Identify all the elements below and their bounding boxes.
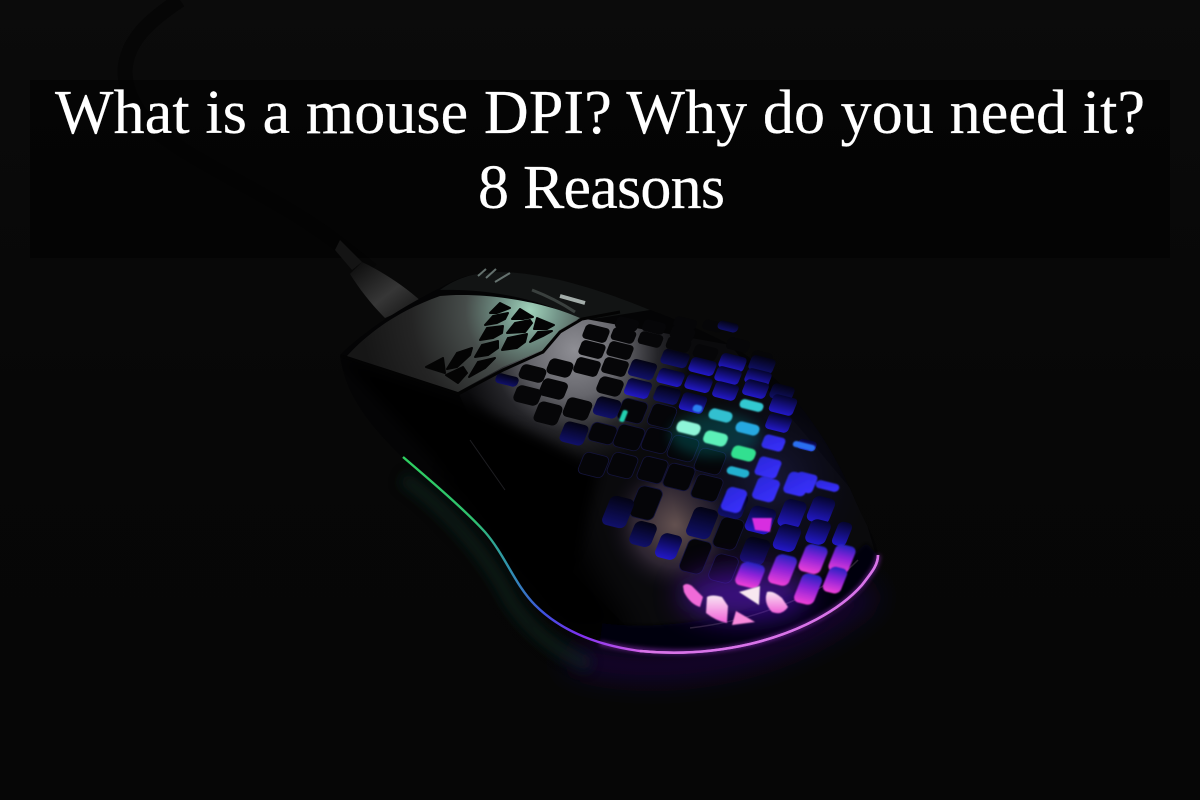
magenta lit holes: [680, 518, 857, 625]
dark holes lower: [577, 397, 746, 584]
cable plug: [335, 240, 422, 318]
green and cyan lit holes: [619, 398, 816, 479]
magenta keys: [733, 543, 857, 606]
dim blue holes: [494, 320, 796, 567]
title: [55, 79, 1145, 222]
pink keys: [683, 518, 788, 625]
floor glow under mouse: [570, 590, 870, 667]
dark holes upper: [512, 315, 774, 427]
title line 2: 8 Reasons: [478, 154, 725, 222]
title line 1: What is a mouse DPI? Why do you need it?: [55, 79, 1145, 147]
RGB LED strip: [403, 457, 878, 653]
mouse: [335, 240, 880, 667]
glow: [670, 413, 760, 457]
title band: [30, 80, 1170, 258]
mouse cable: [125, 0, 372, 270]
body shading and sheen: [468, 320, 876, 628]
left button shell: [347, 295, 580, 392]
LED reflection on desk: [403, 478, 590, 665]
bright blue holes: [623, 352, 854, 561]
vivid blue holes: [719, 434, 841, 514]
top rear section with scroll wheel: [440, 269, 650, 320]
shell seam line: [341, 312, 620, 394]
left shell diamond holes: [426, 303, 554, 383]
side seam line: [470, 440, 505, 490]
glow: [680, 569, 810, 621]
mouse body: [340, 272, 878, 653]
mint keys: [619, 398, 816, 479]
inner rim highlight: [690, 560, 858, 628]
